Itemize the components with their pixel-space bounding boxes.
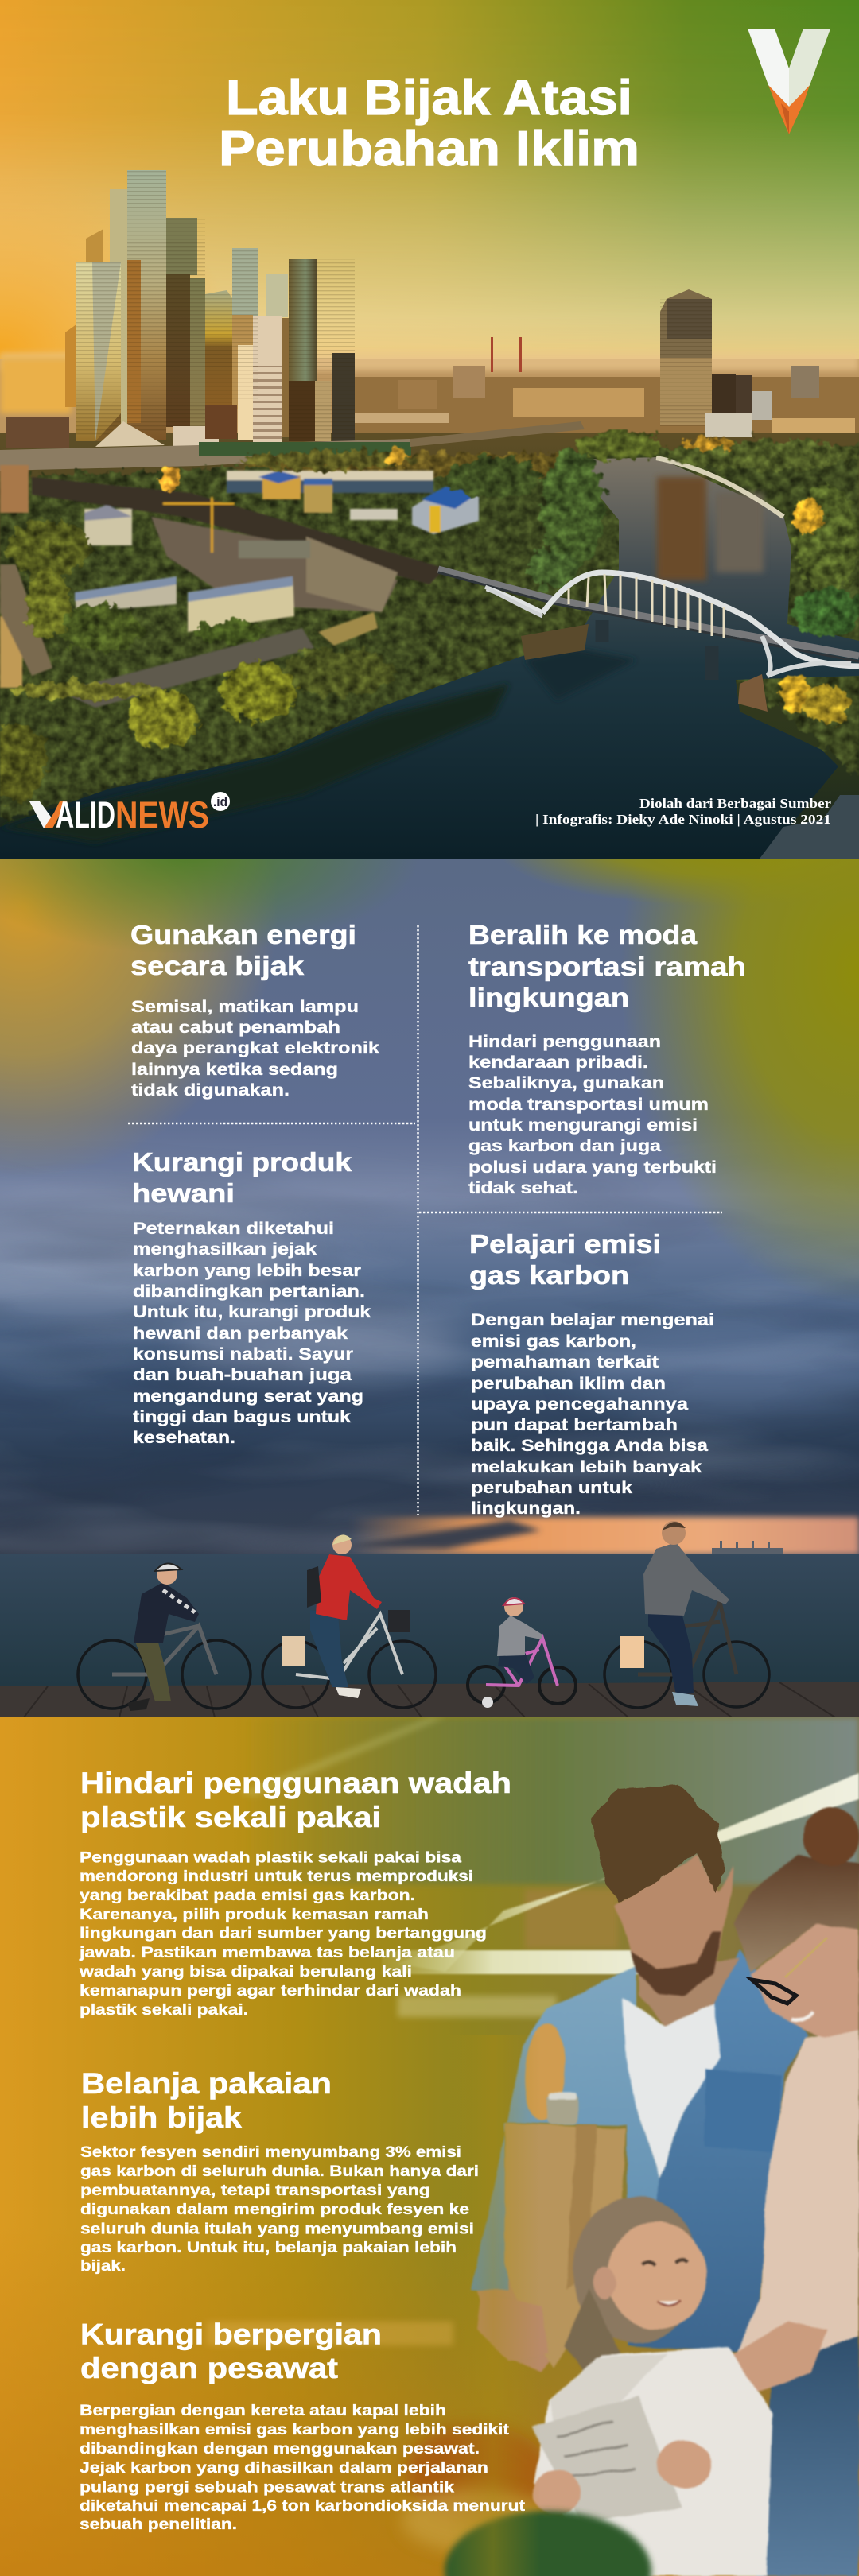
text: Hindari penggunaan wadah plastik: lingkungan dan dari sumber yang bertanggung	[80, 1924, 487, 1942]
text: Kurangi berpergian dengan pesawat: Jejak karbon yang dihasilkan dalam perjalanan	[80, 2459, 488, 2477]
girl	[531, 2197, 772, 2576]
text: Kurangi produk hewani: Untuk itu, kurangi produk	[133, 1303, 371, 1321]
text: Kurangi berpergian dengan pesawat	[80, 2318, 526, 2533]
text: Gunakan energi: Semisal, matikan lampu	[131, 998, 359, 1016]
text: Hindari penggunaan wadah plastik: wadah yang bisa dipakai berulang kali	[79, 1963, 412, 1980]
text: Pelajari emisi gas karbon: lingkungan.	[471, 1499, 581, 1518]
text: Belanja pakaian lebih bijak: digunakan dalam mengirim produk fesyen ke	[80, 2201, 469, 2218]
title	[219, 71, 639, 177]
text: Kurangi berpergian dengan pesawat: pulang pergi sebuah pesawat trans atlantik	[80, 2479, 454, 2496]
text: Belanja pakaian lebih bijak: gas karbon di seluruh dunia. Bukan hanya dari	[80, 2163, 479, 2180]
skyscraper cluster	[6, 170, 355, 448]
text: Hindari penggunaan wadah plastik: kemanapun pergi agar terhindar dari wadah	[80, 1982, 461, 2000]
text: Beralih ke moda transportasi: gas karbon dan juga	[468, 1137, 661, 1155]
text: Belanja pakaian lebih bijak: lebih bijak	[81, 2101, 242, 2134]
text: Gunakan energi: daya perangkat elektronik	[131, 1039, 379, 1057]
text: Kurangi produk hewani: Peternakan diketahui	[133, 1220, 334, 1238]
text: Pelajari emisi gas karbon: Pelajari emisi	[469, 1229, 661, 1259]
text: Beralih ke moda transportasi: tidak sehat.	[468, 1179, 578, 1197]
text: Gunakan energi: secara bijak	[130, 951, 305, 980]
text: Kurangi berpergian dengan pesawat: dengan pesawat	[80, 2352, 338, 2384]
text: Kurangi produk hewani: konsumsi nabati. Sayur	[133, 1345, 353, 1364]
logo: Validnews wordmark	[29, 792, 230, 836]
text: Gunakan energi	[130, 920, 379, 1100]
source credits	[535, 796, 832, 827]
railway bridge	[438, 569, 859, 680]
grocery bag with baguette	[477, 2021, 626, 2368]
text: Kurangi berpergian dengan pesawat: sebuah penelitian.	[80, 2516, 237, 2533]
text: Pelajari emisi gas karbon: melakukan lebih banyak	[471, 1458, 702, 1476]
text: Kurangi produk hewani: kesehatan.	[133, 1429, 235, 1447]
panel: storm sky and cycling family	[0, 636, 859, 1717]
text: Pelajari emisi gas karbon: emisi gas karbon,	[471, 1333, 636, 1351]
stormy sky	[0, 859, 859, 1558]
text: Pelajari emisi gas karbon: baik. Sehingga Anda bisa	[471, 1437, 708, 1455]
orange fade over the left edge of the figures	[445, 2035, 541, 2576]
text: Beralih ke moda transportasi: moda transportasi umum	[468, 1096, 709, 1114]
text: Hindari penggunaan wadah plastik: plastik sekali pakai.	[80, 2001, 248, 2019]
text: Hindari penggunaan wadah plastik: plastik sekali pakai	[80, 1801, 381, 1833]
text: Hindari penggunaan wadah plastik: yang berakibat pada emisi gas karbon.	[80, 1887, 415, 1904]
text: Belanja pakaian lebih bijak	[80, 2067, 479, 2275]
right tower	[660, 289, 752, 437]
title: Laku Bijak Atasi	[226, 71, 632, 126]
text: Hindari penggunaan wadah plastik: jawab. Pastikan membawa tas belanja atau	[79, 1944, 455, 1961]
text: Belanja pakaian lebih bijak: gas karbon. Untuk itu, belanja pakaian lebih	[80, 2239, 457, 2256]
text: Beralih ke moda transportasi	[468, 920, 746, 1197]
elevated highway	[0, 421, 585, 471]
cyclist: small child on pink bike	[468, 1597, 576, 1708]
text: Belanja pakaian lebih bijak: bijak.	[80, 2257, 126, 2275]
ground tree cover	[0, 445, 859, 827]
logo: Validnews wordmark: NEWS	[115, 793, 209, 836]
text: Pelajari emisi gas karbon: Dengan belajar mengenai	[471, 1311, 714, 1329]
text: Pelajari emisi gas karbon: perubahan iklim dan	[471, 1375, 666, 1393]
text: Gunakan energi: Gunakan energi	[130, 920, 356, 949]
text: Pelajari emisi gas karbon: pun dapat bertambah	[471, 1416, 678, 1434]
cyclist: man in grey sweater	[604, 1521, 769, 1708]
text: Hindari penggunaan wadah plastik: Hindari penggunaan wadah	[80, 1767, 511, 1799]
buildings and construction site	[0, 465, 479, 708]
woman	[728, 1807, 859, 2576]
logo: V mark	[748, 29, 830, 134]
text: Beralih ke moda transportasi: Hindari penggunaan	[468, 1033, 661, 1051]
watermelon	[445, 2511, 651, 2576]
sky background gradient	[0, 0, 859, 525]
text: Kurangi produk hewani: menghasilkan jejak	[133, 1240, 317, 1259]
text: Belanja pakaian lebih bijak: Belanja pakaian	[81, 2067, 332, 2100]
tree canopy	[0, 431, 859, 803]
cyclist: boy	[78, 1563, 251, 1711]
text: Beralih ke moda transportasi: Beralih ke moda	[468, 920, 698, 949]
text: Kurangi produk hewani: mengandung serat yang	[133, 1387, 363, 1406]
logo: Validnews wordmark: ALID	[56, 793, 115, 836]
text: Kurangi produk hewani	[132, 1147, 371, 1447]
text: Kurangi berpergian dengan pesawat: Berpergian dengan kereta atau kapal lebih	[80, 2402, 446, 2419]
building at bottom right	[760, 795, 859, 859]
text: Pelajari emisi gas karbon: gas karbon	[469, 1260, 629, 1290]
text: Kurangi produk hewani: karbon yang lebih besar	[133, 1262, 361, 1280]
man	[471, 1855, 809, 2373]
text: Pelajari emisi gas karbon: upaya pencegahannya	[471, 1395, 688, 1414]
distant cranes	[712, 1541, 783, 1554]
source credits: Diolah dari Berbagai Sumber	[639, 796, 832, 811]
river reflection	[0, 477, 764, 843]
blurred shop background	[0, 1717, 859, 2576]
text: Kurangi berpergian dengan pesawat: diketahui mencapai 1,6 ton karbondioksida menurut	[80, 2497, 526, 2515]
text: Gunakan energi: atau cabut penambah	[131, 1018, 340, 1037]
text: Pelajari emisi gas karbon: pemahaman terkait	[471, 1353, 659, 1371]
text: Hindari penggunaan wadah plastik	[79, 1767, 511, 2019]
text: Belanja pakaian lebih bijak: Sektor fesyen sendiri menyumbang 3% emisi	[80, 2143, 461, 2161]
text: Kurangi produk hewani: dibandingkan pertanian.	[133, 1282, 365, 1301]
panel: hero city photo	[0, 0, 859, 859]
text: Gunakan energi: lainnya ketika sedang	[131, 1061, 338, 1079]
riverbank soil	[521, 624, 589, 660]
text: Kurangi berpergian dengan pesawat: dibandingkan dengan menggunakan pesawat.	[80, 2440, 480, 2458]
text: Kurangi produk hewani: dan buah-buahan juga	[133, 1366, 352, 1384]
text: Hindari penggunaan wadah plastik: mendorong industri untuk terus memproduksi	[80, 1868, 473, 1885]
embankment	[656, 458, 783, 517]
woman's glasses	[752, 1938, 827, 2004]
text: Beralih ke moda transportasi: lingkungan	[468, 983, 629, 1012]
text: Pelajari emisi gas karbon: perubahan untuk	[471, 1479, 632, 1497]
text: Hindari penggunaan wadah plastik: Karenanya, pilih produk kemasan ramah	[80, 1906, 429, 1923]
text: Hindari penggunaan wadah plastik: Penggunaan wadah plastik sekali pakai bisa	[80, 1849, 461, 1867]
sea	[0, 1554, 859, 1686]
text: Belanja pakaian lebih bijak: seluruh dunia itulah yang menyumbang emisi	[80, 2220, 474, 2237]
text: Kurangi produk hewani: Kurangi produk	[132, 1147, 352, 1177]
logo: Validnews wordmark: .id	[213, 794, 227, 809]
distant city haze	[0, 337, 859, 433]
text: Kurangi berpergian dengan pesawat: menghasilkan emisi gas karbon yang lebih sedikit	[80, 2421, 510, 2438]
text: Kurangi produk hewani: hewani	[132, 1178, 235, 1208]
text: Beralih ke moda transportasi: Sebaliknya, gunakan	[468, 1074, 664, 1092]
ground	[0, 433, 859, 859]
river water	[0, 457, 859, 859]
title: Perubahan Iklim	[219, 122, 639, 177]
text: Beralih ke moda transportasi: kendaraan pribadi.	[468, 1053, 648, 1072]
cyclist: woman in red jacket	[262, 1534, 436, 1708]
man's hair	[591, 1785, 724, 1903]
wooden deck	[0, 1682, 859, 1717]
source credits: | Infografis: Dieky Ade Ninoki | Agustus 2021	[535, 812, 831, 827]
text: Beralih ke moda transportasi: transportasi ramah	[468, 952, 746, 981]
text: Kurangi produk hewani: hewani dan perbanyak	[133, 1325, 348, 1343]
text: Beralih ke moda transportasi: untuk mengurangi emisi	[468, 1116, 698, 1135]
corner colour overlays	[0, 636, 859, 1304]
text: Kurangi berpergian dengan pesawat: Kurangi berpergian	[80, 2318, 382, 2350]
text: Gunakan energi: tidak digunakan.	[131, 1081, 290, 1100]
text: Pelajari emisi gas karbon	[469, 1229, 714, 1518]
panel: supermarket family photo	[0, 1717, 859, 2576]
text: Kurangi produk hewani: tinggi dan bagus untuk	[133, 1408, 351, 1426]
text: Beralih ke moda transportasi: polusi udara yang terbukti	[468, 1158, 717, 1177]
text: Belanja pakaian lebih bijak: pembuatannya, tetapi transportasi yang	[80, 2182, 430, 2199]
